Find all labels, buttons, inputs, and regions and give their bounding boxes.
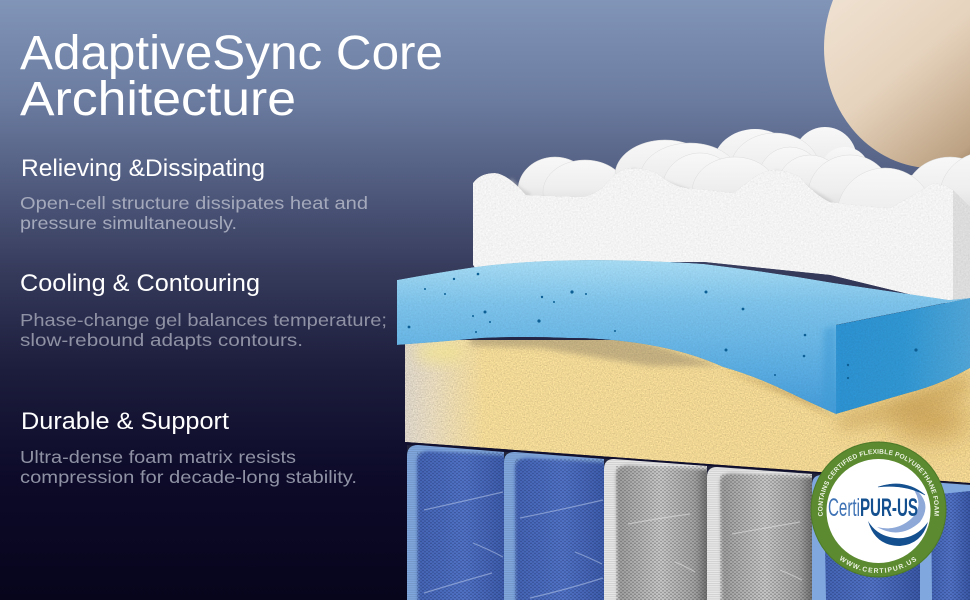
title: AdaptiveSync Core: [20, 27, 443, 80]
CertiPUR-US certification badge: [810, 442, 946, 578]
swoosh logo: [868, 484, 928, 546]
text block: cooling and contouring: Cooling & Contouring: [20, 270, 260, 297]
dark backing behind coils: [407, 445, 970, 600]
badge ring text bottom: WWW.CERTIPUR.US: [840, 556, 916, 573]
coil 4 grey: [707, 467, 820, 600]
white comfort foam layer: [473, 133, 970, 305]
title: [20, 27, 443, 126]
text block: relieving and dissipating: Relieving &Dissipating: [21, 155, 265, 182]
text block: cooling and contouring: Phase-change gel balances temperature;: [20, 310, 387, 330]
far contoured foam bumps: [713, 127, 869, 201]
foam side face: [953, 190, 970, 305]
groove shading: [510, 170, 832, 204]
corner soft shade: [822, 326, 836, 412]
blue foam side face: [836, 298, 970, 414]
text block: cooling and contouring: [20, 270, 387, 350]
blue foam front face: [397, 260, 970, 414]
text block: durable and support: compression for decade-long stability.: [20, 467, 357, 487]
CertiPUR-US wordmark: CertiPUR-US: [828, 494, 918, 522]
coil 2 blue: [504, 452, 612, 600]
coil 6 blue: [920, 482, 970, 600]
coil 5 blue: [812, 475, 920, 600]
text block: durable and support: Ultra-dense foam matrix resists: [20, 447, 296, 467]
pocket spring coils: [407, 445, 970, 600]
badge ring text top: CONTAINS CERTIFIED FLEXIBLE POLYURETHANE FOAM: [818, 449, 940, 516]
text block: relieving and dissipating: pressure simultaneously.: [20, 213, 237, 233]
blue gel memory foam layer: [397, 260, 970, 414]
badge white centre: [826, 459, 930, 563]
text block: relieving and dissipating: [20, 155, 368, 233]
text block: relieving and dissipating: Open-cell structure dissipates heat and: [20, 193, 368, 213]
foam contour bumps: [518, 133, 970, 262]
text block: cooling and contouring: slow-rebound adapts contours.: [20, 330, 303, 350]
foam front face: [473, 168, 953, 305]
title: Architecture: [20, 73, 296, 126]
yellow support foam layer: [405, 334, 970, 483]
illustration: mattress layer stack: [397, 0, 970, 600]
text block: durable and support: [20, 408, 357, 487]
foam air-pocket specks: [408, 273, 918, 379]
badge green ring: [811, 442, 946, 577]
coil 1 blue: [407, 445, 512, 600]
sphere body: [824, 0, 970, 168]
coil 3 grey: [604, 459, 715, 600]
text block: durable and support: Durable & Support: [21, 408, 229, 435]
